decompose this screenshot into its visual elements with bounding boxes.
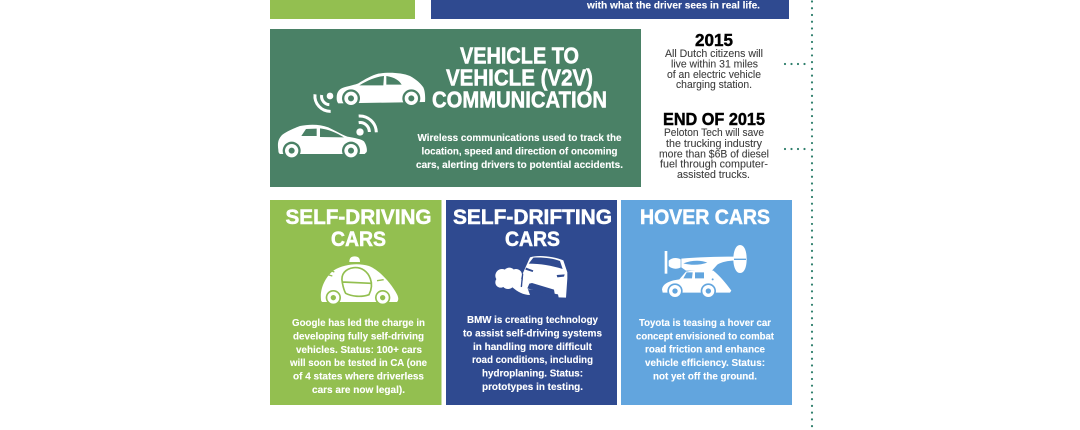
panel: vehicle to vehicle communication: [270, 29, 641, 187]
text: hover cars description: [636, 317, 774, 382]
callout: 2015: All Dutch citizens will: [665, 48, 763, 60]
heading: self-driving cars: SELF-DRIVING: [286, 205, 432, 229]
text: self-driving description: [289, 317, 427, 396]
callout: 2015: live within 31 miles: [671, 58, 758, 70]
text: self-driving description: Google has led the charge in: [292, 317, 425, 329]
callout: end of 2015: the trucking industry: [666, 138, 762, 150]
text: V2V description: location, speed and direction of oncoming: [422, 146, 618, 158]
heading: self-drifting cars: SELF-DRIFTING: [453, 205, 612, 229]
heading: self-driving cars: CARS: [331, 227, 386, 251]
icon: hover car with propeller: [662, 245, 747, 299]
text: V2V description: [416, 132, 623, 171]
callout: end of 2015: [659, 109, 769, 181]
icon: two connected cars: [278, 73, 425, 160]
panel: cropped green panel above: [270, 0, 415, 19]
panel: self-drifting cars: [446, 200, 617, 405]
heading: V2V: [432, 42, 607, 112]
callout: end of 2015: END OF 2015: [663, 109, 765, 129]
callout: end of 2015: Peloton Tech will save: [664, 127, 764, 139]
callout: 2015: of an electric vehicle: [667, 69, 761, 81]
text: hover cars description: road friction and enhance: [645, 344, 765, 356]
icon: drifting car with spray: [495, 256, 567, 298]
text: self-drifting description: hydroplaning. Status:: [482, 368, 583, 380]
text: hover cars description: vehicle efficiency. Status:: [645, 357, 765, 369]
panel: self-driving cars: [270, 200, 442, 405]
panel: hover cars: [621, 200, 792, 405]
text: hover cars description: concept envisioned to combat: [636, 330, 774, 342]
timeline: vertical dotted line with connectors: [785, 2, 812, 430]
text: self-drifting description: to assist self-driving systems: [463, 328, 602, 340]
text: self-driving description: cars are now legal).: [312, 384, 405, 396]
text: self-drifting description: [463, 314, 602, 393]
text: self-driving description: vehicles. Status: 100+ cars: [296, 344, 422, 356]
text: self-driving description: developing fully self-driving: [293, 330, 424, 342]
callout: end of 2015: more than $6B of diesel: [659, 148, 769, 160]
text: V2V description: cars, alerting drivers to potential accidents.: [416, 159, 623, 171]
panel: cropped navy panel above: [431, 0, 789, 19]
text: self-drifting description: BMW is creating technology: [467, 314, 598, 326]
text: self-drifting description: prototypes in testing.: [482, 381, 583, 393]
text: V2V description: Wireless communications used to track the: [418, 132, 622, 144]
text: self-driving description: will soon be tested in CA (one: [289, 357, 427, 369]
text: self-driving description: of 4 states where driverless: [293, 370, 424, 382]
text: hover cars description: not yet off the ground.: [653, 370, 757, 382]
callout: 2015: 2015: [695, 30, 733, 50]
heading: hover cars: HOVER CARS: [640, 205, 770, 229]
text: self-drifting description: road conditions, including: [472, 354, 593, 366]
heading: self-driving cars: [286, 205, 432, 251]
heading: self-drifting cars: [453, 205, 612, 251]
callout: end of 2015: fuel through computer-: [660, 158, 768, 170]
callout: 2015: [665, 30, 763, 91]
heading: V2V: VEHICLE (V2V): [446, 64, 593, 90]
heading: V2V: COMMUNICATION: [432, 86, 607, 112]
callout: 2015: charging station.: [676, 79, 752, 91]
text: hover cars description: Toyota is teasing a hover car: [639, 317, 771, 329]
text: self-drifting description: in handling more difficult: [473, 341, 592, 353]
icon: self-driving pod car: [321, 256, 398, 305]
heading: self-drifting cars: CARS: [505, 227, 560, 251]
callout: end of 2015: assisted trucks.: [677, 169, 750, 181]
heading: V2V: VEHICLE TO: [460, 42, 579, 68]
